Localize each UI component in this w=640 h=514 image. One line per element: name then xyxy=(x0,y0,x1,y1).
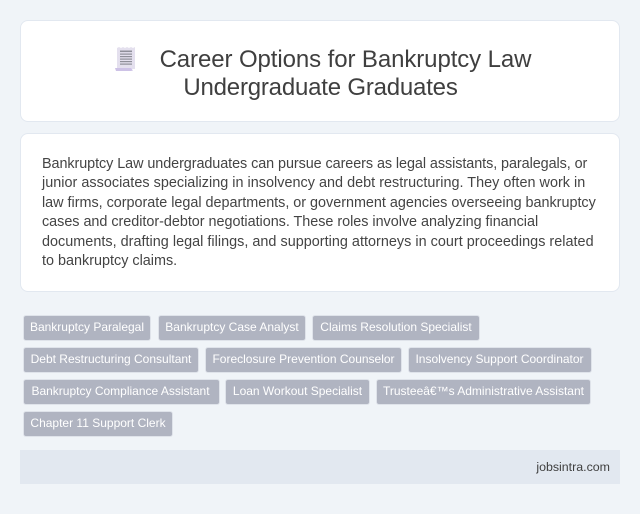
tag xyxy=(158,315,306,341)
tag xyxy=(376,379,591,405)
description text: documents, drafting legal filings, and supporting attorneys in court proceedings related xyxy=(42,234,594,250)
header panel xyxy=(20,20,620,122)
tag xyxy=(23,347,199,373)
tag xyxy=(23,315,151,341)
title: Undergraduate Graduates xyxy=(183,74,458,101)
tag: Foreclosure Prevention Counselor xyxy=(212,352,395,366)
description text: to bankruptcy claims. xyxy=(42,253,177,269)
title: Career Options for Bankruptcy Law xyxy=(160,46,531,73)
tag xyxy=(23,379,220,405)
career tags xyxy=(23,315,592,437)
tag: Trusteeâ€™s Administrative Assistant xyxy=(383,384,584,398)
footer bar xyxy=(20,450,620,484)
icon: document xyxy=(115,47,135,71)
title xyxy=(160,46,532,101)
description text: cases and creditor-debtor negotiations. These roles involve analyzing financial xyxy=(42,214,538,230)
tag xyxy=(312,315,480,341)
tag xyxy=(205,347,402,373)
tag xyxy=(408,347,592,373)
footer text: source: jobsintra.com xyxy=(536,460,610,474)
tag: Chapter 11 Support Clerk xyxy=(30,416,166,430)
tag: Insolvency Support Coordinator xyxy=(415,352,584,366)
description text: junior associates specializing in insolvency and debt restructuring. They often work in xyxy=(42,175,585,191)
tag: Bankruptcy Case Analyst xyxy=(165,320,299,334)
tag: Loan Workout Specialist xyxy=(233,384,362,398)
tag: Debt Restructuring Consultant xyxy=(31,352,191,366)
tag xyxy=(225,379,370,405)
description text: Bankruptcy Law undergraduates can pursue careers as legal assistants, paralegals, or xyxy=(42,156,587,172)
tag: Bankruptcy Paralegal xyxy=(30,320,144,334)
description text: law firms, corporate legal departments, or government agencies overseeing bankruptcy xyxy=(42,195,596,211)
tag: Bankruptcy Compliance Assistant xyxy=(31,384,210,398)
description panel xyxy=(20,133,620,292)
tag xyxy=(23,411,173,437)
description text xyxy=(42,156,596,269)
tag: Claims Resolution Specialist xyxy=(320,320,472,334)
